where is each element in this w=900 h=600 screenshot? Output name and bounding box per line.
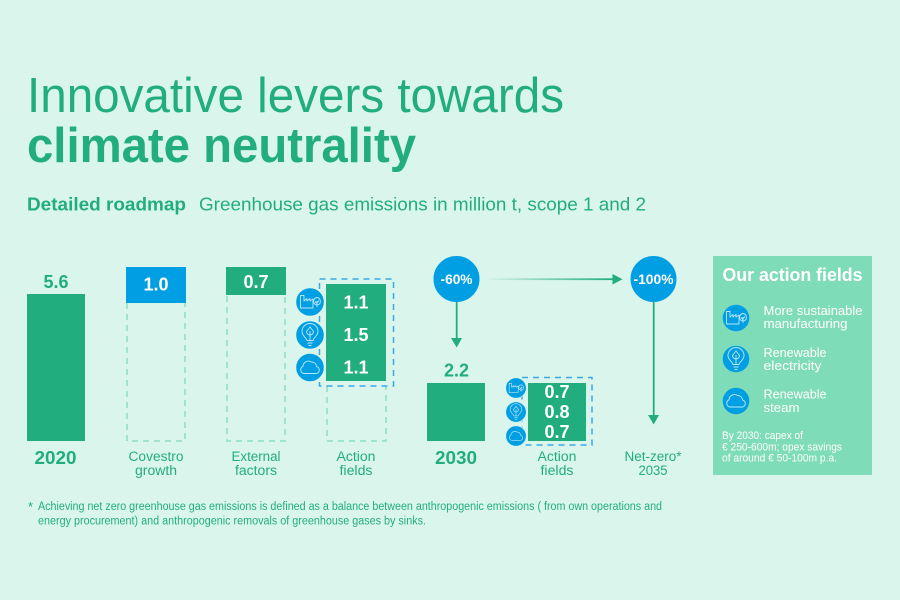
icon: factory [296,288,324,316]
bar: External factors [226,267,286,478]
footnote [28,499,662,528]
icon: factory small [506,378,526,398]
bar: Action fields 2030-2035: 0.7 [544,382,570,402]
arrow: -60% down to 2030 [451,302,462,348]
title [27,69,564,173]
legend text: electricity: electricity [764,358,822,373]
bar: Covestro growth: 1.0 [143,274,169,294]
bar: Action fields 2030-2035: 0.8 [544,402,570,422]
arrow: -60% to -100% [484,274,622,284]
legend text: electricity: Renewable [764,345,826,360]
capex note: € 250-600m; opex savings [722,442,842,454]
bar: External factors: factors [235,463,277,478]
title: Innovative levers towards [27,69,564,123]
bar: 2030: 2.2 [444,360,469,380]
label: Net-zero 2035: 2035 [638,463,668,478]
subtitle: Greenhouse gas emissions in million t, scope 1 and 2 [199,194,646,214]
bar: 2020: 2020 [34,447,76,468]
badge: -100%: -100% [634,272,674,287]
footnote: energy procurement) and anthropogenic removals of greenhouse gases by sinks. [38,516,426,528]
bar: Covestro growth: growth [135,463,177,478]
bar: Action fields 2030-2035: Action [538,449,576,464]
legend text: steam: Renewable [764,386,826,402]
legend icon: factory [723,305,749,331]
badge: -100% [630,256,677,302]
bar: 2020: 5.6 [43,272,69,292]
bar: Action fields 2030-2035: fields [540,463,574,478]
footnote: Achieving net zero greenhouse gas emissions is defined as a balance between anthropogenic emissions ( from own operations and [38,501,662,513]
bar: Action fields 2020-2030: 1.5 [343,325,369,345]
arrow: -100% down to net-zero [648,302,659,424]
legend text: manufacturing: More sustainable [764,303,862,318]
legend icon: cloud [723,388,749,414]
title: climate neutrality [27,119,416,173]
bar: External factors: 0.7 [243,272,269,292]
legend text: manufacturing [764,303,862,331]
legend text: steam [764,386,826,415]
icon: cloud small [506,426,526,446]
icon: cloud [296,353,324,382]
bar: Action fields 2020-2030: fields [340,463,373,478]
bar: 2030: 2030 [435,447,477,468]
bar: Action fields 2020-2030: 1.1 [343,358,369,378]
bar: Covestro growth [126,267,186,478]
capex note [722,430,842,464]
label: Net-zero 2035 [624,449,682,478]
bar: Action fields 2020-2030 [320,279,394,478]
label: Net-zero 2035: Net-zero* [624,449,682,464]
footnote: * [28,499,33,514]
subtitle: Detailed roadmap [27,194,186,214]
legend text: steam: steam [764,400,800,415]
legend icon: bulb [723,346,749,372]
panel: our action fields [713,256,872,475]
legend text: manufacturing: manufacturing [764,316,848,331]
capex note: of around € 50-100m p.a. [722,452,837,464]
bar: 2030 [427,360,485,468]
bar: Action fields 2030-2035: 0.7 [544,422,570,442]
bar: 2020 [27,272,85,468]
capex note: By 2030: capex of [722,430,804,442]
badge: -60% [433,256,480,302]
icon: light bulb [296,321,324,349]
bar: External factors: External [232,449,280,464]
badge: -60%: -60% [440,272,472,287]
bar: Action fields 2030-2035 [522,378,592,478]
bar: Covestro growth: Covestro [128,449,184,464]
bar: Action fields 2020-2030: Action [336,449,376,464]
icon: light bulb small [506,402,526,422]
panel heading: Our action fields [722,265,862,285]
legend text: electricity [764,345,826,373]
bar: Action fields 2020-2030: 1.1 [343,292,369,312]
subtitle [27,194,646,214]
